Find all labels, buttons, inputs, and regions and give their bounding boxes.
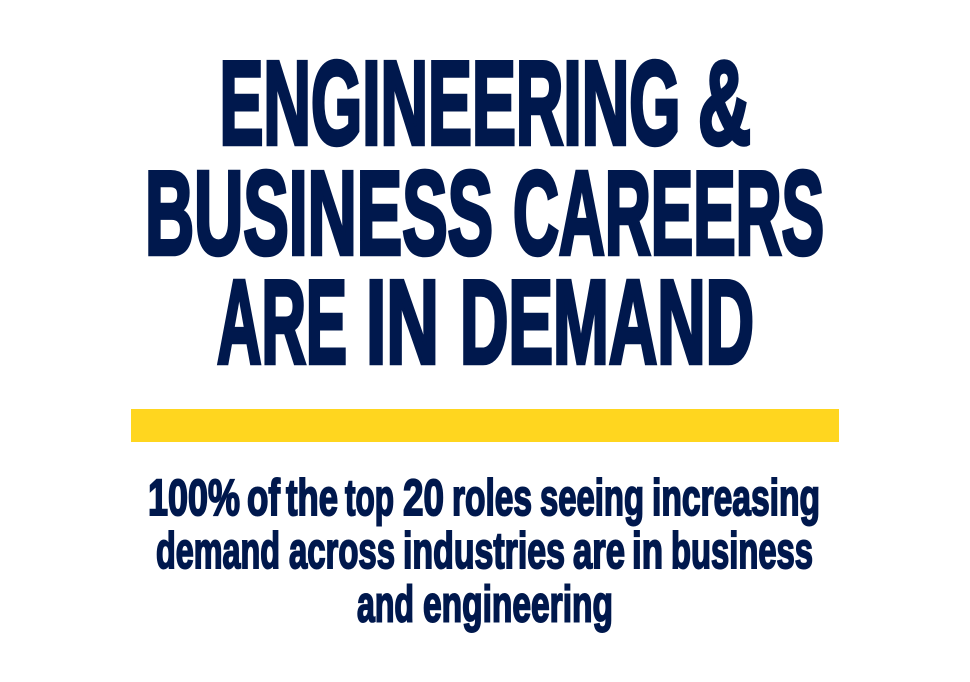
subheading text: engineering — [423, 576, 613, 632]
subheading text: top — [345, 469, 394, 526]
title: IN — [366, 256, 439, 389]
title: ARE — [217, 256, 347, 389]
subheading text: 20 — [403, 469, 444, 526]
subheading text: are — [573, 522, 625, 579]
title — [145, 37, 824, 389]
subheading text: in — [632, 522, 663, 579]
subheading text — [148, 469, 820, 632]
subheading text: demand — [156, 522, 280, 579]
subheading text: business — [671, 522, 813, 579]
subheading text: and — [357, 576, 414, 632]
yellow divider bar — [131, 409, 839, 442]
subheading text: of — [247, 469, 281, 526]
subheading text: increasing — [652, 469, 820, 526]
title: BUSINESS — [145, 147, 493, 280]
title: & — [698, 37, 751, 170]
subheading text: 100% — [148, 469, 240, 526]
subheading text: across — [289, 522, 395, 579]
title: DEMAND — [460, 256, 754, 389]
subheading text: industries — [403, 522, 565, 579]
subheading text: the — [286, 469, 338, 526]
subheading text: roles — [452, 469, 532, 526]
subheading text: seeing — [540, 469, 644, 526]
